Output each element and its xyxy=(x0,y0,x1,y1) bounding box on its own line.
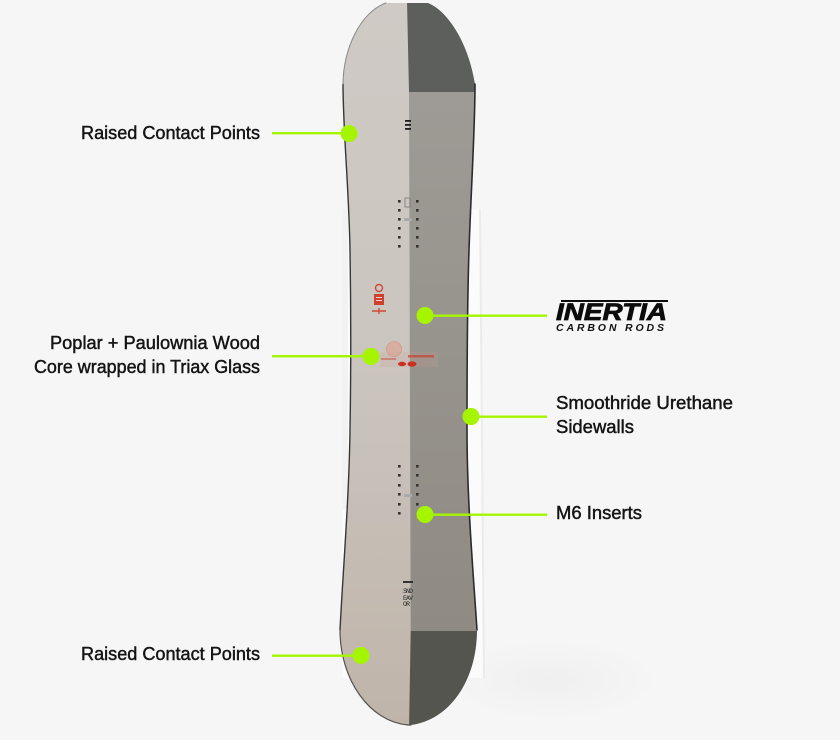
display stand xyxy=(342,209,485,678)
board left half xyxy=(340,3,411,724)
board edges xyxy=(340,3,477,725)
floor shadow xyxy=(440,638,660,722)
callout: raised contact points bottom xyxy=(81,644,370,664)
callout: m6 inserts xyxy=(416,503,642,523)
inertia logo: CARBON RODS xyxy=(556,322,664,334)
endeavor wordmark xyxy=(403,581,413,608)
callout: m6 inserts: M6 Inserts xyxy=(556,503,642,523)
callout: wood core: Core wrapped in Triax Glass xyxy=(34,357,260,377)
board right middle panel xyxy=(409,92,477,631)
pioneer graphic xyxy=(380,342,438,367)
board top dark tip xyxy=(407,3,475,92)
inertia logo: INERTIA xyxy=(556,299,667,326)
callout: wood core: Poplar + Paulownia Wood xyxy=(50,333,260,353)
callout: sidewalls: Sidewalls xyxy=(556,417,634,437)
callout: inertia carbon rods xyxy=(416,299,668,334)
endeavor wordmark: OR xyxy=(403,601,410,608)
red stamp logos xyxy=(372,284,386,314)
endeavor wordmark: EAV xyxy=(403,595,413,602)
lower inserts xyxy=(398,465,419,515)
callout: raised contact points top: Raised Contact Points xyxy=(81,123,260,143)
upper inserts xyxy=(398,198,419,248)
centre tick marks xyxy=(405,120,411,130)
callout: sidewalls: Smoothride Urethane xyxy=(556,393,733,413)
callout: wood core xyxy=(34,333,380,377)
callout: raised contact points bottom: Raised Contact Points xyxy=(81,644,260,664)
callout: raised contact points top xyxy=(81,123,358,143)
snowboard xyxy=(339,2,478,726)
board bottom dark tip xyxy=(409,631,477,725)
inertia logo xyxy=(556,299,668,334)
callout: sidewalls xyxy=(462,393,733,437)
endeavor wordmark: SND xyxy=(403,588,413,595)
